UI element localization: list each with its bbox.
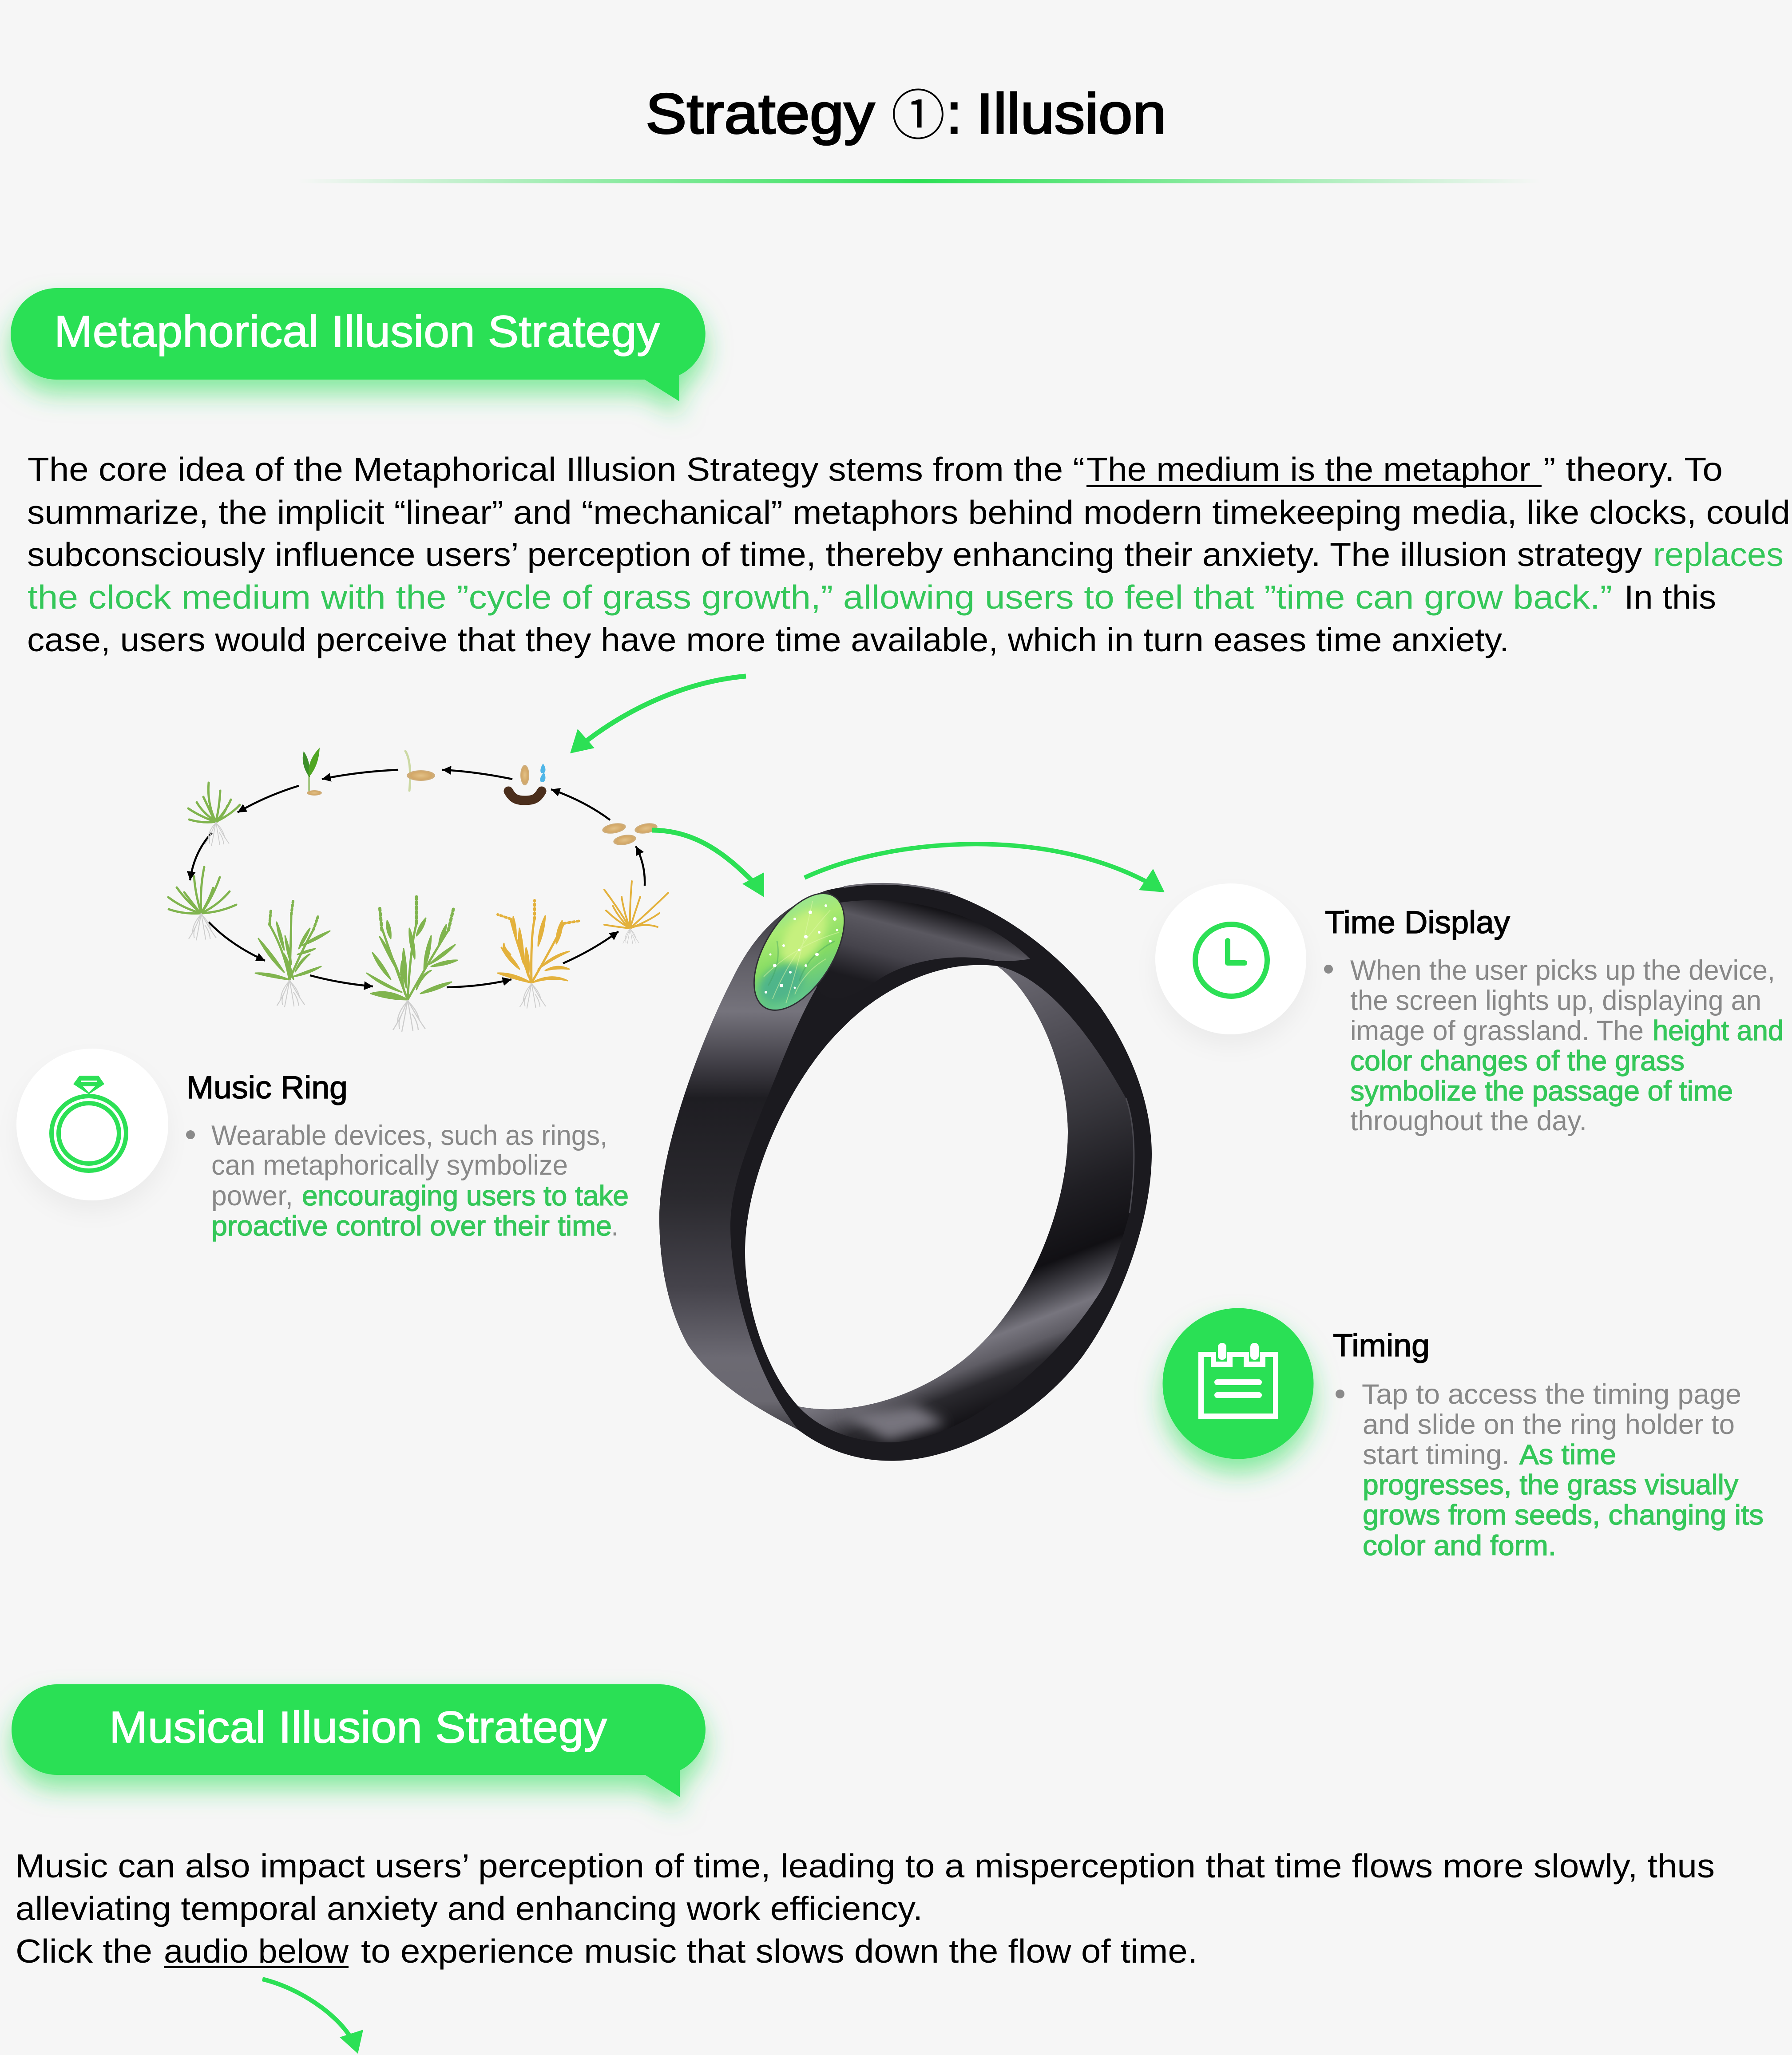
paragraph: metaphorical illusion strategy: The medium is the metaphor [1086,451,1530,488]
text: time display description: symbolize the passage of time [1350,1076,1733,1107]
text: time display description: image of grassland. The [1350,1015,1644,1046]
text: timing description: grows from seeds, changing its [1363,1500,1764,1531]
stage: young grass [188,783,240,846]
text: time display description: height and [1653,1015,1784,1046]
text: timing description: color and form. [1363,1530,1556,1561]
text: music ring description: can metaphorically symbolize [211,1150,568,1181]
text: music ring description: power, [211,1180,293,1212]
feature: music ring [16,1049,629,1242]
title: Strategy [646,82,875,146]
stage: seeds [601,821,658,847]
paragraph: metaphorical illusion strategy [27,451,1790,658]
paragraph: musical illusion strategy: Music can also impact users’ perception of time, leading to a misperception that time flows more slowly, thus [15,1847,1715,1885]
paragraph: metaphorical illusion strategy: subconsciously influence users’ perception of time, thereby enhancing their anxiety. The illusion strategy [27,536,1642,573]
heading bubble: Musical Illusion Strategy [12,1684,706,1797]
ring screen showing grass [753,893,845,1011]
stage: seed, water and soil [508,764,546,800]
stage: mature grass [367,895,457,1032]
ring top face [817,900,1030,998]
text: timing description: and slide on the ring holder to [1363,1409,1735,1440]
text: timing description: progresses, the grass visually [1363,1469,1739,1501]
paragraph: metaphorical illusion strategy: case, users would perceive that they have more time available, which in turn eases time anxiety. [27,621,1509,658]
feature: timing [1162,1308,1764,1561]
text: time display description: the screen lights up, displaying an [1350,985,1761,1016]
ring inner band [790,959,1146,1447]
paragraph: metaphorical illusion strategy: the clock medium with the ”cycle of grass growth,” allowing users to feel that ”time can grow back.” [28,578,1612,616]
title rule [297,179,1541,183]
arrow: paragraph to audio [262,1979,363,2054]
text: time display description: throughout the day. [1350,1105,1587,1136]
arrow: grass cycle seeds to ring screen [652,830,764,897]
text: music ring description: . [611,1211,619,1242]
text: time display description [1324,955,1784,1136]
heading bubble: Metaphorical Illusion Strategy: Metaphorical Illusion Strategy [54,307,660,356]
paragraph: musical illusion strategy [15,1847,1715,1970]
arrow: ring to time display [805,844,1165,892]
text: timing description: As time [1519,1439,1616,1470]
paragraph: metaphorical illusion strategy: ” theory. To [1543,451,1723,488]
paragraph: metaphorical illusion strategy: In this [1624,578,1716,616]
text: music ring description: encouraging users to take [302,1180,629,1212]
title: : [946,82,962,146]
stage: flowering grass [255,901,330,1007]
heading: music ring: Music Ring [186,1070,348,1105]
heading bubble: Metaphorical Illusion Strategy [11,288,706,401]
text: timing description: Tap to access the timing page [1362,1379,1741,1410]
text: timing description [1336,1379,1764,1561]
paragraph: metaphorical illusion strategy: summarize, the implicit “linear” and “mechanical” metaphors behind modern timekeeping media, like clocks, could [27,494,1790,531]
arrow: paragraph to grass cycle [570,676,746,753]
stage: dry golden grass [604,881,668,944]
icon: calendar [1162,1308,1313,1459]
paragraph: musical illusion strategy: Click the [16,1932,152,1970]
text: music ring description [186,1120,629,1242]
ring left face [659,890,844,1430]
stage: tillering grass [168,867,236,940]
title: Illusion [976,82,1166,146]
ring body [659,884,1152,1461]
heading bubble: Musical Illusion Strategy: Musical Illusion Strategy [109,1703,607,1752]
text: time display description: color changes of the grass [1350,1045,1685,1077]
icon: ring [16,1049,168,1200]
feature: time display [1155,883,1784,1136]
heading: timing: Timing [1333,1328,1430,1363]
ring product image [659,877,1152,1461]
text: music ring description: Wearable devices, such as rings, [211,1120,607,1151]
diagram: grass growth cycle [168,748,668,1032]
stage: seedling [303,748,322,796]
paragraph: musical illusion strategy: audio below [164,1932,349,1970]
stage: ripening golden grass [498,900,580,1009]
heading: time display: Time Display [1325,905,1511,940]
icon: clock [1155,883,1306,1034]
text: time display description: When the user picks up the device, [1350,955,1775,986]
title [646,72,1166,150]
paragraph: metaphorical illusion strategy: The core idea of the Metaphorical Illusion Strategy stems from the “ [28,451,1085,488]
paragraph: musical illusion strategy: alleviating temporal anxiety and enhancing work efficiency. [16,1890,923,1927]
text: timing description: start timing. [1363,1439,1510,1470]
cycle arrows [190,770,645,987]
title: ① [891,72,945,150]
paragraph: musical illusion strategy: to experience music that slows down the flow of time. [361,1932,1197,1970]
stage: germinating seed [405,751,435,791]
paragraph: metaphorical illusion strategy: replaces [1653,536,1784,573]
text: music ring description: proactive control over their time [211,1211,612,1242]
